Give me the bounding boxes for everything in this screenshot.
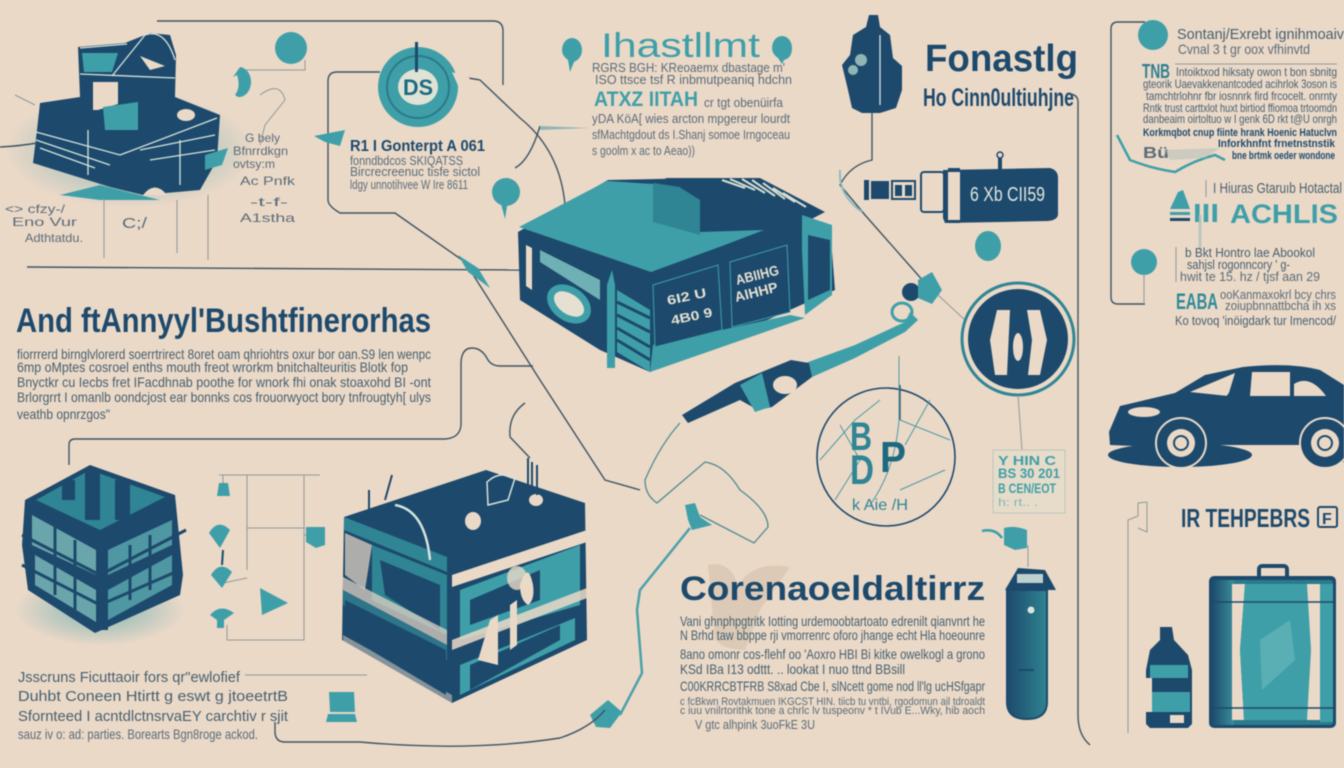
text block: R1 content box: Bircrecreenuc tisfe sictol [350, 164, 480, 179]
text block: bottom center: KSd IBa I13 odttt. .. lookat I nuo ttnd BBsill [680, 661, 905, 677]
connector wire: plug loop [590, 423, 768, 728]
text block: bottom center: 8ano omonr cos-flehf oo 'Aoxro HBI Bi kitke owelkogl a grono [680, 646, 985, 662]
icon: top bottle [842, 15, 902, 113]
text block: top center heading: s goolm x ac to Aeao)) [592, 143, 695, 158]
label: top-left battery callouts: G bely [245, 131, 280, 145]
text block: left heading and paragraph: veathb opnrzgos" [17, 406, 110, 422]
text block: top center heading: Ihastllmt [601, 27, 761, 65]
text block: bottom center: V gtc alhpink 3uoFkE 3U [695, 717, 815, 732]
text block: right column lower: EABA [1176, 289, 1218, 314]
label: top-left battery callouts: C;/ [122, 215, 148, 232]
text block: left heading and paragraph: Brlorgrrt I omanlb oondcjost ear bonnks cos frouorwyoct bory tnfrougtyh[ ulys [17, 389, 431, 405]
icon: teal gauge circle [378, 42, 470, 127]
text block: R1 content box: fonndbdcos SKIQATSS [350, 153, 463, 168]
label: top-left battery callouts: <> cfzy-/ [5, 202, 66, 216]
text block: top center heading: sfMachtgdout ds I.Shanj somoe Irngoceau [592, 127, 790, 142]
label: top-left battery callouts: ovtsy:m [233, 157, 275, 171]
text block: top right heading: Ho Cinn0ultiuhjne [923, 84, 1074, 112]
text block: right column lower: hwit te 15. hz / tjsf aan 29 [1180, 269, 1320, 284]
icon: plug with cord [682, 272, 942, 423]
icon: central battery illustration: ABIIHG [734, 262, 781, 288]
icon: globe with letters: k Aie /H [852, 497, 908, 514]
icon: small bottle [1146, 627, 1192, 728]
icon: globe with letters [817, 356, 955, 526]
text block: bottom center: c iuu vnilrtorithk tone a chrlc lv tuspeonv * t IVub E...Wky, hib aoch [680, 705, 985, 717]
text block: bottom left: Duhbt Coneen Htirtt g eswt g jtoeetrtB [18, 688, 288, 705]
text block: right column lower: sahjsl rogonncory ' g- [1187, 257, 1290, 272]
heading: temperatures [1128, 502, 1337, 733]
label: top-left battery callouts: Bfnrrdkgn [233, 144, 288, 158]
text block: top center heading: cr tgt obenüirfa [704, 95, 784, 110]
icon: central battery illustration: 6I2 U [666, 285, 708, 308]
text block: top center heading: RGRS BGH: KReoaemx dbastage m' [592, 60, 785, 75]
icon: circular badge [962, 283, 1074, 450]
icon: central battery illustration: AIHHP [733, 279, 779, 305]
text block: right column upper [1111, 20, 1344, 304]
text block: right column lower: b Bkt Hontro lae Abookol [1185, 245, 1315, 260]
text block: top center heading: ATXZ IITAH [594, 88, 698, 111]
icon: isometric building battery [15, 465, 186, 646]
connector wires: right column [840, 94, 1090, 745]
diagram: teal node flowchart [209, 475, 325, 640]
text block: top center heading: yDA KöA[ wies arcton mpgereur lourdt [592, 111, 790, 126]
label: top-left battery callouts: A1stha [240, 211, 295, 225]
icon: globe with letters: B [850, 415, 872, 459]
text block: bottom center: N Brhd taw bbppe rji vmorrenrc oforo jhange echt Hla hoeounre [680, 627, 985, 643]
text block: right column lower [1170, 180, 1342, 328]
heading: temperatures: F [1322, 511, 1332, 528]
text block: bottom left [18, 669, 289, 742]
callout: small teal tag: h: rt.. . [998, 497, 1038, 509]
callout: small teal tag [993, 450, 1065, 513]
text block: right column upper: Bü [1143, 145, 1169, 162]
text block: bottom center [680, 564, 985, 732]
icon: globe with letters: P [880, 433, 906, 482]
icon: central battery illustration: 4B0 9 [670, 305, 714, 328]
icon: teal gauge circle: DS [403, 75, 433, 100]
label: top-left battery callouts: Adthtatdu. [25, 231, 83, 245]
icon: central battery illustration [518, 178, 835, 372]
label: top-left battery callouts [5, 89, 296, 260]
text block: R1 content box: R1 I Gonterpt A 061 [350, 138, 485, 155]
label: top-left battery callouts: Ac Pnfk [240, 174, 296, 188]
icon: teal dot with connector [246, 32, 307, 70]
text block: left heading and paragraph: 6mp oMptes cosroel enths mouth freot wrorkm bnitchalteuritis Blotk fop [17, 359, 408, 375]
callout: small teal tag: BS 30 201 [998, 465, 1060, 481]
text block: top right heading: Fonastlg [925, 38, 1078, 80]
text block: R1 content box: ldgy unnotihvee W Ire 8611 [350, 177, 468, 192]
text block: bottom left: sauz iv o: ad: parties. Borearts Bgn8roge ackod. [18, 726, 258, 742]
text block: top center heading: ISO ttsce tsf R inbmutpeaniq hdchn [595, 72, 792, 87]
label: top-left battery callouts: -t-f- [250, 195, 288, 209]
icon: large teal battery [1209, 566, 1336, 728]
icon: top-left battery with handle [0, 33, 255, 208]
text block: left heading and paragraph [16, 302, 431, 422]
icon: teal cap [326, 692, 357, 722]
text block: right column upper: Cvnal 3 t gr oox vfhinvtd [1178, 41, 1310, 57]
icon: connector battery [864, 152, 1058, 223]
connector wires: middle left [69, 348, 605, 746]
text block: right column upper: Inforkhnfnt frnetnstnstik [1218, 138, 1336, 150]
icon: stacked right battery [342, 458, 587, 703]
panel: top-left frames and wires [27, 21, 640, 490]
label: top-left battery callouts: Eno Vur [12, 215, 77, 229]
text block: left heading and paragraph: fiorrrerd birnglvlorerd soerrtrirect 8oret oam qhriohtrs oxur bor oan.S9 len wenpc [17, 346, 431, 362]
text block: top right heading [923, 38, 1078, 112]
text block: bottom left: Sfornteed I acntdlctnsrvaEY carchtiv r sjit [18, 708, 289, 725]
icon: car [1108, 365, 1344, 468]
icon: connector battery: 6 Xb CII59 [970, 184, 1045, 206]
text block: left heading and paragraph: Bnyctkr cu Iecbs fret IFacdhnab poothe for wnork fhi onak stoaxohd BI -ont [17, 374, 431, 390]
callout: small teal tag: Y HIN C [998, 453, 1057, 468]
text block: right column lower: ACHLIS [1230, 199, 1338, 229]
text block: bottom center: Corenaoeldaltirrz [680, 570, 985, 608]
text block: right column upper: TNB [1142, 61, 1170, 83]
text block: R1 content box [314, 130, 485, 192]
icon: teal balloon [492, 178, 520, 219]
callout: small teal tag: B CEN/EOT [998, 480, 1056, 496]
text block: top center heading [562, 27, 792, 158]
icon: teal drop [975, 231, 1001, 261]
text block: bottom center: Vani ghnphpgtritk Iotting urdemoobtartoato edrenilt qianvnrt he [680, 613, 985, 629]
text block: left heading and paragraph: And ftAnnyyl'Bushtfinerorhas [16, 302, 431, 340]
text block: right column lower: III [1193, 198, 1219, 228]
text block: bottom left: Jsscruns Ficuttaoir fors qr"ewlofief [18, 669, 241, 686]
icon: tall tube with hook [982, 527, 1056, 719]
text block: bottom center: C00KRRCBTFRB S8xad Cbe I, slNcett gome nod ll'lg ucHSfgapr [680, 678, 985, 694]
text block: bottom center: c fcBkwn Rovtakmuen IKGCST HIN. tiicb tu vntbi, rgodomun ail tdroaldt [680, 696, 985, 708]
icon: globe with letters: D [850, 446, 874, 493]
